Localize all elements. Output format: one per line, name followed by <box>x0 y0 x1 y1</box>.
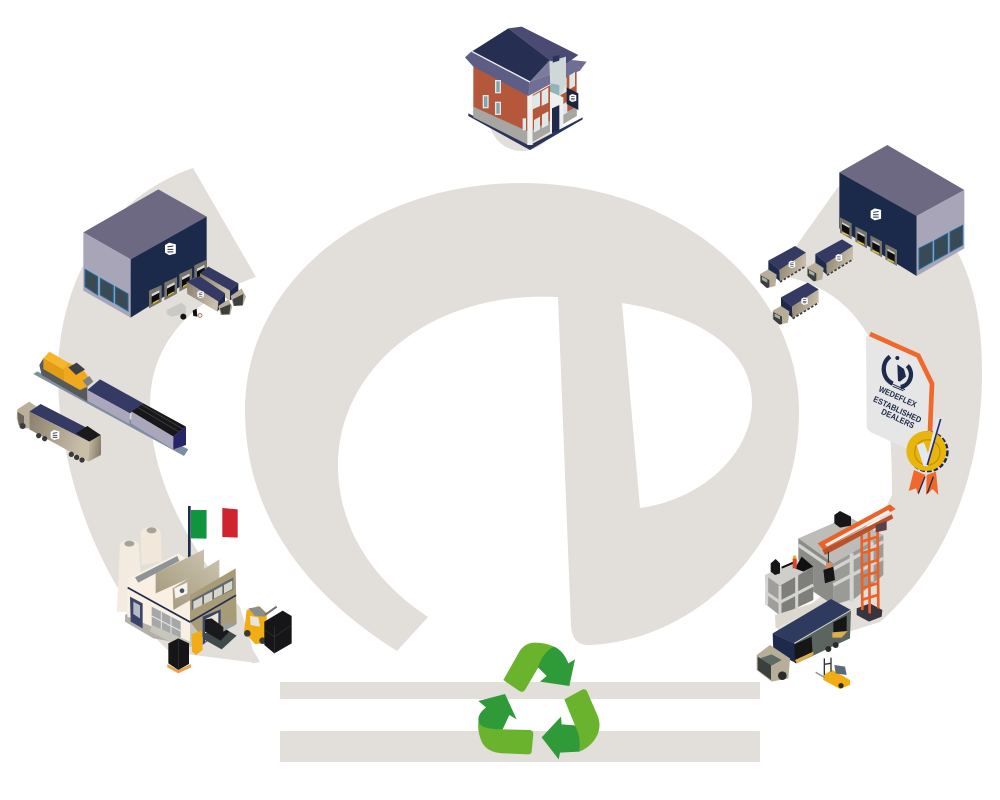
background: central logo ring <box>245 183 799 651</box>
small forklift <box>816 658 850 689</box>
background: top circle behind house <box>489 85 555 151</box>
ribbons <box>909 470 938 495</box>
background: upper bottom bar <box>280 682 760 699</box>
stacked pallets <box>771 511 851 575</box>
badge text: WEDEFLEX <box>877 384 919 410</box>
badge text: DEALERS <box>880 406 916 431</box>
truck: rear <box>200 267 246 306</box>
crane <box>818 504 896 622</box>
badge text <box>872 384 923 431</box>
icon: established dealers badge <box>866 334 947 495</box>
pallet black large <box>264 611 292 653</box>
icon: right warehouse with trucks <box>760 145 964 325</box>
dealer logo <box>884 356 911 391</box>
icon: recycling symbol <box>478 643 599 759</box>
chimneys <box>117 527 162 613</box>
icon: dealer house <box>465 27 587 150</box>
badge text: ESTABLISHED <box>872 394 923 425</box>
background: right arc band <box>772 175 982 650</box>
background: logo inner counter <box>622 303 752 508</box>
yellow post <box>192 631 203 655</box>
truck 3 <box>773 283 819 325</box>
icon: freight train <box>33 352 188 456</box>
pallet black <box>167 638 191 673</box>
truck 2 <box>807 239 853 281</box>
truck 1 <box>760 246 806 288</box>
truck: front <box>187 276 232 315</box>
check mark <box>917 417 942 467</box>
forklift <box>244 606 277 644</box>
background: left arc band <box>58 168 257 663</box>
small vehicle and parts <box>167 303 202 320</box>
icon: long truck with trailer <box>17 402 101 463</box>
top arrow <box>503 643 575 692</box>
background: lower bottom bar <box>280 731 760 762</box>
worker and beam <box>782 555 797 568</box>
icon: left warehouse with trucks <box>83 189 246 320</box>
right arrow <box>542 689 599 759</box>
delivery truck <box>757 599 851 682</box>
rosette <box>906 431 947 471</box>
conveyor with pallet <box>203 618 260 663</box>
icon: Italian factory <box>117 506 292 673</box>
flag <box>188 506 238 559</box>
icon: construction site with crane <box>757 504 896 689</box>
left arrow <box>478 694 533 754</box>
